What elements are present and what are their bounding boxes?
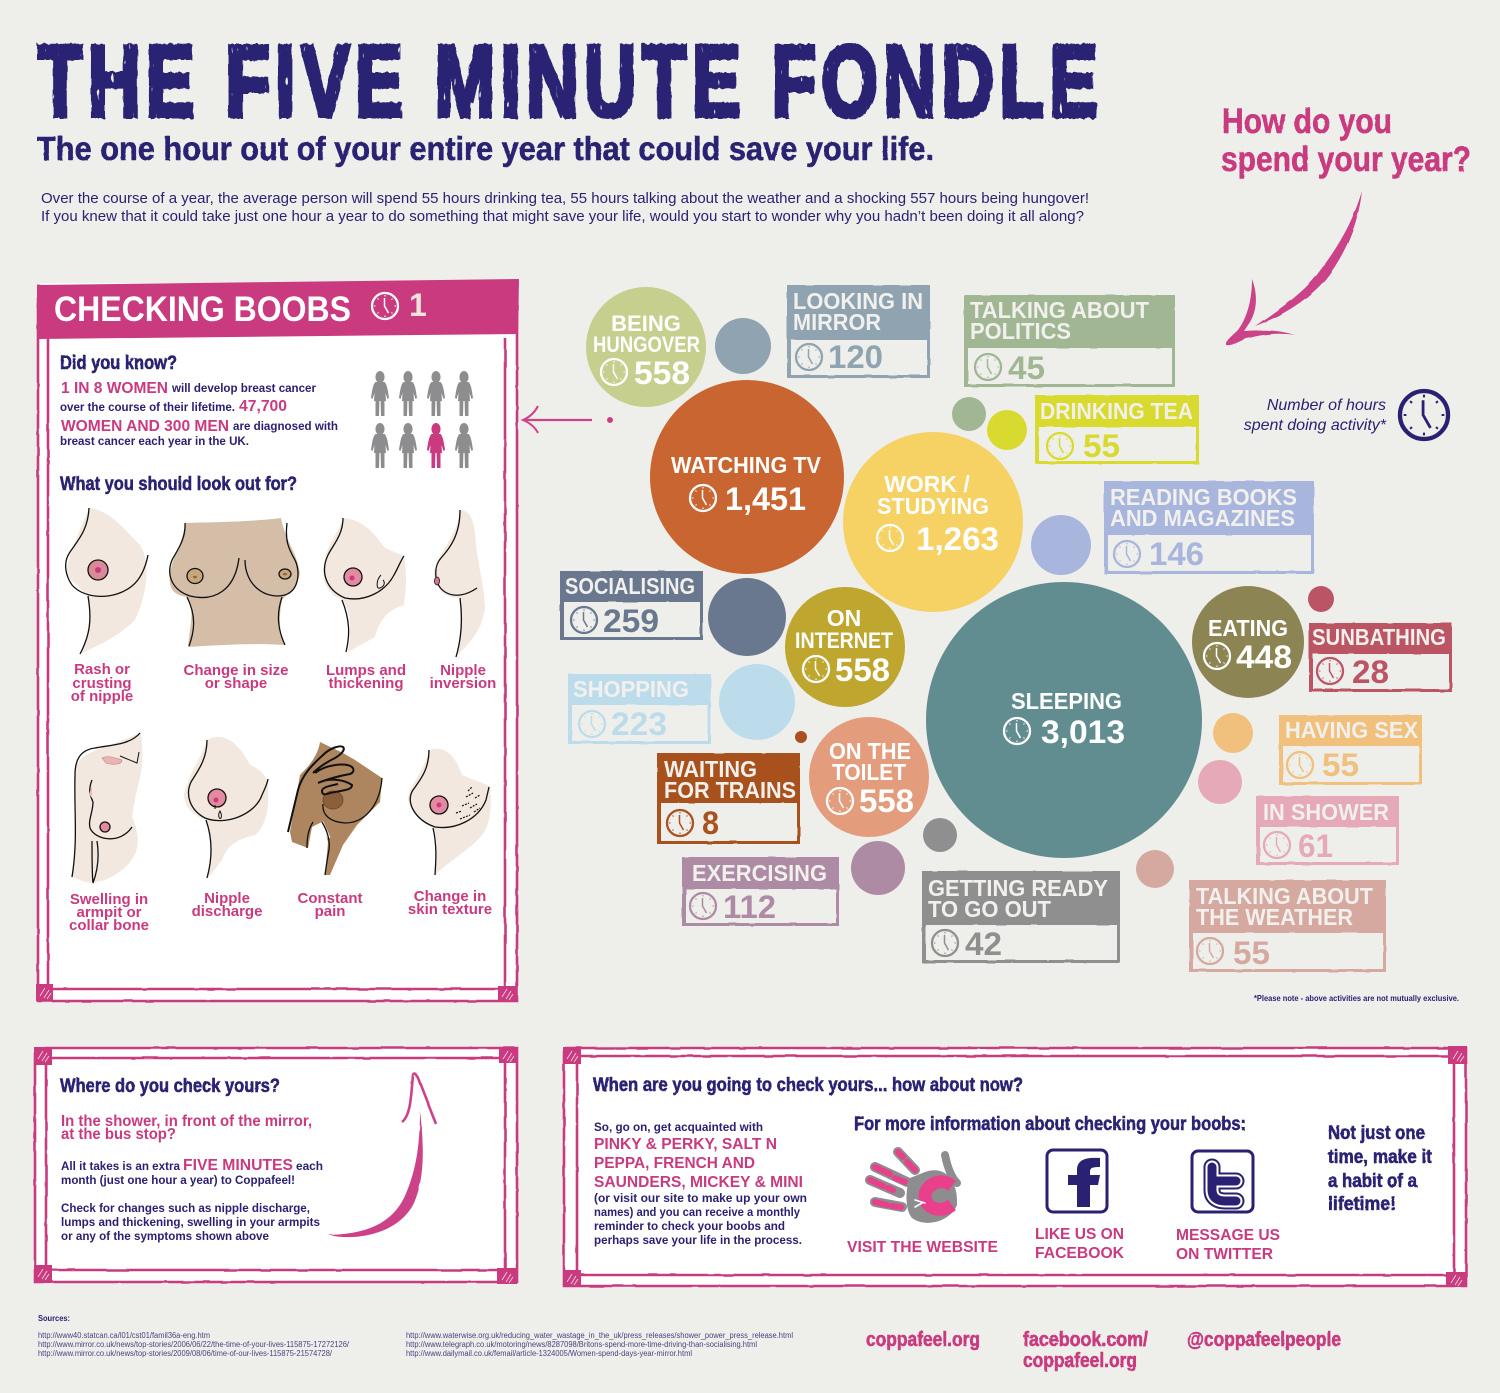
body text: lumps and thickening, swelling in your armpits — [61, 1215, 320, 1229]
symptom labels: Change in — [414, 888, 486, 905]
callout: how do you spend your year — [1221, 102, 1471, 179]
label: talking about the weather: 55 — [1233, 935, 1270, 971]
dot: politics — [952, 397, 986, 431]
body text: (or visit our site to make up your own — [594, 1191, 807, 1205]
dot: socialising — [708, 578, 786, 656]
label: sunbathing: 28 — [1352, 654, 1389, 690]
body text: SAUNDERS, MICKEY & MINI — [594, 1174, 803, 1191]
body text: at the bus stop? — [61, 1126, 176, 1143]
bubble: on internet: 558 — [835, 652, 890, 688]
label: having sex: HAVING SEX — [1285, 717, 1419, 743]
dot: sunbathing — [1308, 586, 1334, 612]
label: getting ready: TO GO OUT — [928, 896, 1051, 922]
label: sunbathing — [1309, 623, 1452, 692]
corner marks — [563, 1046, 1467, 1287]
panel border — [38, 284, 517, 1001]
label: drinking tea — [1035, 395, 1199, 464]
bubble: eating: 448 — [1236, 639, 1292, 675]
bubble: work / studying: WORK / — [884, 471, 970, 497]
symptom labels: Lumps and — [326, 662, 406, 679]
sources: http://www.mirror.co.uk/news/top-stories/2006/06/22/the-time-of-your-lives-115875-17272126/ — [38, 1340, 350, 1349]
body text: names) and you can receive a monthly — [594, 1205, 800, 1219]
subtitle: The one hour out of your entire year that could save your life. — [37, 130, 934, 167]
arrow: to bubbles — [1226, 191, 1362, 345]
bubble: being hungover: HUNGOVER — [593, 332, 700, 357]
panel heading: 1 — [409, 287, 427, 323]
symptom labels: discharge — [192, 903, 262, 920]
body text: month (just one hour a year) to Coppafeel! — [61, 1173, 295, 1187]
intro text — [41, 191, 1089, 225]
did you know: will develop breast cancer — [171, 381, 316, 395]
symptom labels — [69, 661, 496, 934]
label: waiting for trains: WAITING — [664, 756, 757, 782]
dot: in shower — [1198, 760, 1242, 804]
body text: PINKY & PERKY, SALT N — [594, 1136, 777, 1153]
label: looking in mirror: MIRROR — [793, 309, 881, 335]
footer: coppafeel links: facebook.com/ — [1023, 1329, 1148, 1351]
icon: twitter — [1192, 1151, 1253, 1212]
body text: PEPPA, FRENCH AND — [594, 1155, 755, 1172]
symptom labels: collar bone — [69, 917, 149, 934]
did you know: 1 IN 8 WOMEN — [61, 380, 168, 397]
label: message us on twitter — [1176, 1227, 1280, 1263]
body text: So, go on, get acquainted with — [594, 1120, 763, 1134]
legend: number of hours — [1244, 391, 1448, 439]
footer: coppafeel links: @coppafeelpeople — [1187, 1329, 1341, 1351]
slogan: time, make it — [1328, 1147, 1433, 1168]
label: getting ready: GETTING READY — [928, 875, 1108, 901]
legend: number of hours: Number of hours — [1267, 397, 1386, 414]
panel heading: CHECKING BOOBS — [54, 289, 351, 329]
dot: mirror — [715, 318, 771, 374]
intro text: Over the course of a year, the average person will spend 55 hours drinking tea, 55 hours talking about the weather and a shocking 557 hours being hungover! — [41, 191, 1089, 207]
label: talking about politics: POLITICS — [970, 318, 1071, 344]
dot: waiting — [795, 731, 807, 743]
symptom labels: Change in size — [183, 662, 289, 679]
label: looking in mirror: 120 — [828, 339, 883, 375]
illustration: skin texture — [408, 749, 491, 875]
symptom labels: thickening — [328, 675, 404, 692]
label: visit the website: VISIT THE WEBSITE — [847, 1239, 998, 1256]
dot: weather — [1136, 850, 1174, 888]
label: having sex: 55 — [1322, 747, 1359, 783]
body text — [594, 1120, 807, 1247]
bubble: on the toilet — [809, 717, 929, 837]
label: talking about the weather: THE WEATHER — [1196, 904, 1353, 930]
heading: Where do you check yours? — [60, 1076, 280, 1097]
icon: 1 in 8 women — [371, 371, 473, 468]
did you know: 47,700 — [239, 398, 287, 415]
bubble: watching tv — [650, 380, 844, 574]
bubble: on internet — [785, 587, 905, 707]
label: reading: READING BOOKS — [1110, 484, 1297, 510]
label: drinking tea: 55 — [1083, 428, 1120, 464]
illustration: nipple inversion — [434, 510, 485, 657]
label: like us on facebook: FACEBOOK — [1035, 1245, 1124, 1262]
panel border — [564, 1048, 1466, 1286]
body text: In the shower, in front of the mirror, — [61, 1113, 312, 1130]
arrow: to panel — [523, 406, 612, 433]
corner marks — [36, 984, 517, 1002]
label: exercising — [682, 857, 839, 926]
body text: perhaps save your life in the process. — [594, 1233, 802, 1247]
label: exercising: 112 — [723, 889, 776, 925]
bubble: on the toilet: ON THE — [829, 738, 911, 764]
body text: reminder to check your boobs and — [594, 1219, 785, 1233]
bubble: on the toilet: 558 — [859, 783, 914, 819]
symptom labels: or shape — [205, 675, 267, 692]
bubble: work / studying — [843, 432, 1023, 612]
footer: coppafeel links: coppafeel.org — [866, 1329, 980, 1351]
label: getting ready — [922, 871, 1120, 963]
heading: When are you going to check yours... how about now? — [593, 1075, 1023, 1096]
illustration: nipple discharge — [184, 737, 268, 878]
label: socialising: SOCIALISING — [565, 573, 695, 599]
slogan: Not just one — [1328, 1123, 1425, 1144]
did you know — [60, 353, 338, 448]
label: shopping — [568, 674, 711, 744]
label: in shower — [1256, 796, 1399, 865]
label: in shower: IN SHOWER — [1263, 799, 1389, 825]
sources — [38, 1313, 793, 1358]
bubble: eating: EATING — [1208, 615, 1288, 641]
sources: Sources: — [38, 1313, 70, 1323]
label: message us on twitter: ON TWITTER — [1176, 1246, 1273, 1263]
bubble: eating — [1192, 586, 1304, 698]
dot: tea — [987, 410, 1027, 450]
label: shopping: 223 — [611, 706, 667, 742]
footer: coppafeel links — [866, 1329, 1341, 1372]
sources: http://www.telegraph.co.uk/motoring/news/8287098/Britons-spend-more-time-driving-than-socialising.html — [406, 1340, 757, 1349]
label: drinking tea: DRINKING TEA — [1040, 398, 1193, 424]
symptom labels: crusting — [72, 675, 132, 692]
sources: http://www.waterwise.org.uk/reducing_water_wastage_in_the_uk/press_releases/shower_power_press_release.html — [406, 1331, 793, 1340]
body text: All it takes is an extra — [61, 1159, 180, 1173]
symptom labels: Constant — [298, 890, 362, 907]
sources: http://www40.statcan.ca/l01/cst01/famil36a-eng.htm — [38, 1331, 210, 1340]
label: message us on twitter: MESSAGE US — [1176, 1227, 1280, 1244]
symptom labels: Nipple — [440, 662, 486, 679]
label: talking about the weather — [1189, 880, 1386, 972]
symptom labels: Rash or — [74, 661, 130, 678]
label: reading: AND MAGAZINES — [1110, 505, 1295, 531]
body text: each — [296, 1159, 323, 1173]
more information heading: For more information about checking your boobs: — [854, 1114, 1246, 1135]
label: looking in mirror: LOOKING IN — [793, 288, 923, 314]
dot: reading — [1031, 515, 1091, 575]
label: talking about politics: 45 — [1008, 350, 1045, 386]
bubble: work / studying: STUDYING — [877, 493, 989, 519]
bubble: on the toilet: TOILET — [832, 759, 906, 785]
label: waiting for trains: FOR TRAINS — [664, 777, 796, 803]
body text: Check for changes such as nipple discharge, — [61, 1201, 310, 1215]
label: talking about politics — [964, 295, 1175, 387]
dot: having sex — [1213, 713, 1253, 753]
did you know: breast cancer each year in the UK. — [60, 434, 249, 448]
dot: getting ready — [923, 818, 957, 852]
illustration: rash — [66, 508, 148, 654]
title: THE FIVE MINUTE FONDLE — [38, 24, 1098, 138]
panel border — [35, 1048, 517, 1282]
bubble: sleeping: SLEEPING — [1011, 688, 1122, 714]
symptom labels: Swelling in — [70, 891, 148, 908]
footnote: *Please note - above activities are not mutually exclusive. — [1254, 993, 1459, 1003]
slogan: lifetime! — [1328, 1194, 1396, 1215]
illustration: lumps — [323, 518, 406, 652]
panel: where do you check yours — [34, 1047, 517, 1284]
body text: FIVE MINUTES — [183, 1157, 293, 1174]
label: looking in mirror — [787, 285, 930, 378]
dot: shopping — [719, 664, 795, 740]
label: reading: 146 — [1149, 536, 1204, 572]
bubble: sleeping — [926, 582, 1202, 858]
icon: facebook — [1047, 1150, 1107, 1212]
bubble: on internet: ON — [827, 605, 861, 631]
label: socialising — [560, 571, 703, 640]
slogan: a habit of a — [1328, 1171, 1417, 1192]
illustration: size change — [170, 518, 300, 647]
label: getting ready: 42 — [965, 926, 1002, 962]
corner marks — [34, 1047, 517, 1284]
illustration: constant pain — [288, 742, 382, 875]
legend: number of hours: spent doing activity* — [1244, 417, 1387, 434]
bubble: being hungover: BEING — [611, 311, 681, 336]
illustration: swelling — [72, 732, 142, 883]
did you know: WOMEN AND 300 MEN — [61, 418, 229, 435]
label: talking about the weather: TALKING ABOUT — [1196, 883, 1373, 909]
arrow: upward — [328, 1074, 436, 1237]
symptom labels: Nipple — [204, 890, 250, 907]
icon: handprint logo — [870, 1152, 957, 1223]
label: in shower: 61 — [1298, 828, 1333, 864]
slogan — [1328, 1123, 1433, 1215]
label: waiting for trains — [657, 753, 800, 844]
panel header band — [37, 279, 519, 339]
bubble: watching tv: WATCHING TV — [671, 452, 822, 478]
label: sunbathing: SUNBATHING — [1312, 624, 1446, 650]
bubble: being hungover: 558 — [634, 355, 690, 391]
intro text: If you knew that it could take just one hour a year to do something that might save your life, would you start to wonder why you hadn’t been doing it all along? — [41, 209, 1084, 225]
did you know: Did you know? — [60, 353, 177, 374]
panel: when are you going to check — [563, 1046, 1467, 1287]
label: waiting for trains: 8 — [702, 805, 719, 841]
label: socialising: 259 — [603, 603, 659, 639]
sources: http://www.dailymail.co.uk/femail/article-1324005/Women-spend-days-year-mirror.html — [406, 1349, 692, 1358]
did you know: over the course of their lifetime. — [60, 400, 235, 414]
footer: coppafeel links: coppafeel.org — [1023, 1350, 1137, 1372]
label: having sex — [1279, 715, 1422, 785]
symptom labels: armpit or — [76, 904, 142, 921]
symptom labels: inversion — [430, 675, 496, 692]
bubble: sleeping: 3,013 — [1041, 714, 1125, 750]
what to look out for heading: What you should look out for? — [60, 474, 297, 495]
symptom labels: pain — [315, 903, 345, 920]
bubble: work / studying: 1,263 — [916, 521, 999, 557]
label: like us on facebook: LIKE US ON — [1035, 1226, 1124, 1243]
bubble: watching tv: 1,451 — [725, 481, 806, 517]
dot: exercising — [851, 841, 905, 895]
did you know: are diagnosed with — [233, 419, 338, 433]
label: like us on facebook — [1035, 1226, 1124, 1262]
label: shopping: SHOPPING — [573, 676, 689, 702]
symptom labels: of nipple — [71, 688, 133, 705]
label: reading — [1104, 481, 1314, 574]
sources: http://www.mirror.co.uk/news/top-stories/2009/08/06/time-of-our-lives-115875-21574728/ — [38, 1349, 333, 1358]
body text: or any of the symptoms shown above — [61, 1229, 269, 1243]
label: talking about politics: TALKING ABOUT — [970, 297, 1149, 323]
bubble: on internet: INTERNET — [795, 628, 894, 653]
callout: how do you spend your year: How do you — [1222, 102, 1392, 141]
panel: checking boobs — [36, 279, 519, 1002]
bubble: being hungover — [586, 287, 706, 407]
label: exercising: EXERCISING — [692, 860, 827, 886]
symptom labels: skin texture — [408, 901, 492, 918]
body text — [61, 1113, 323, 1243]
